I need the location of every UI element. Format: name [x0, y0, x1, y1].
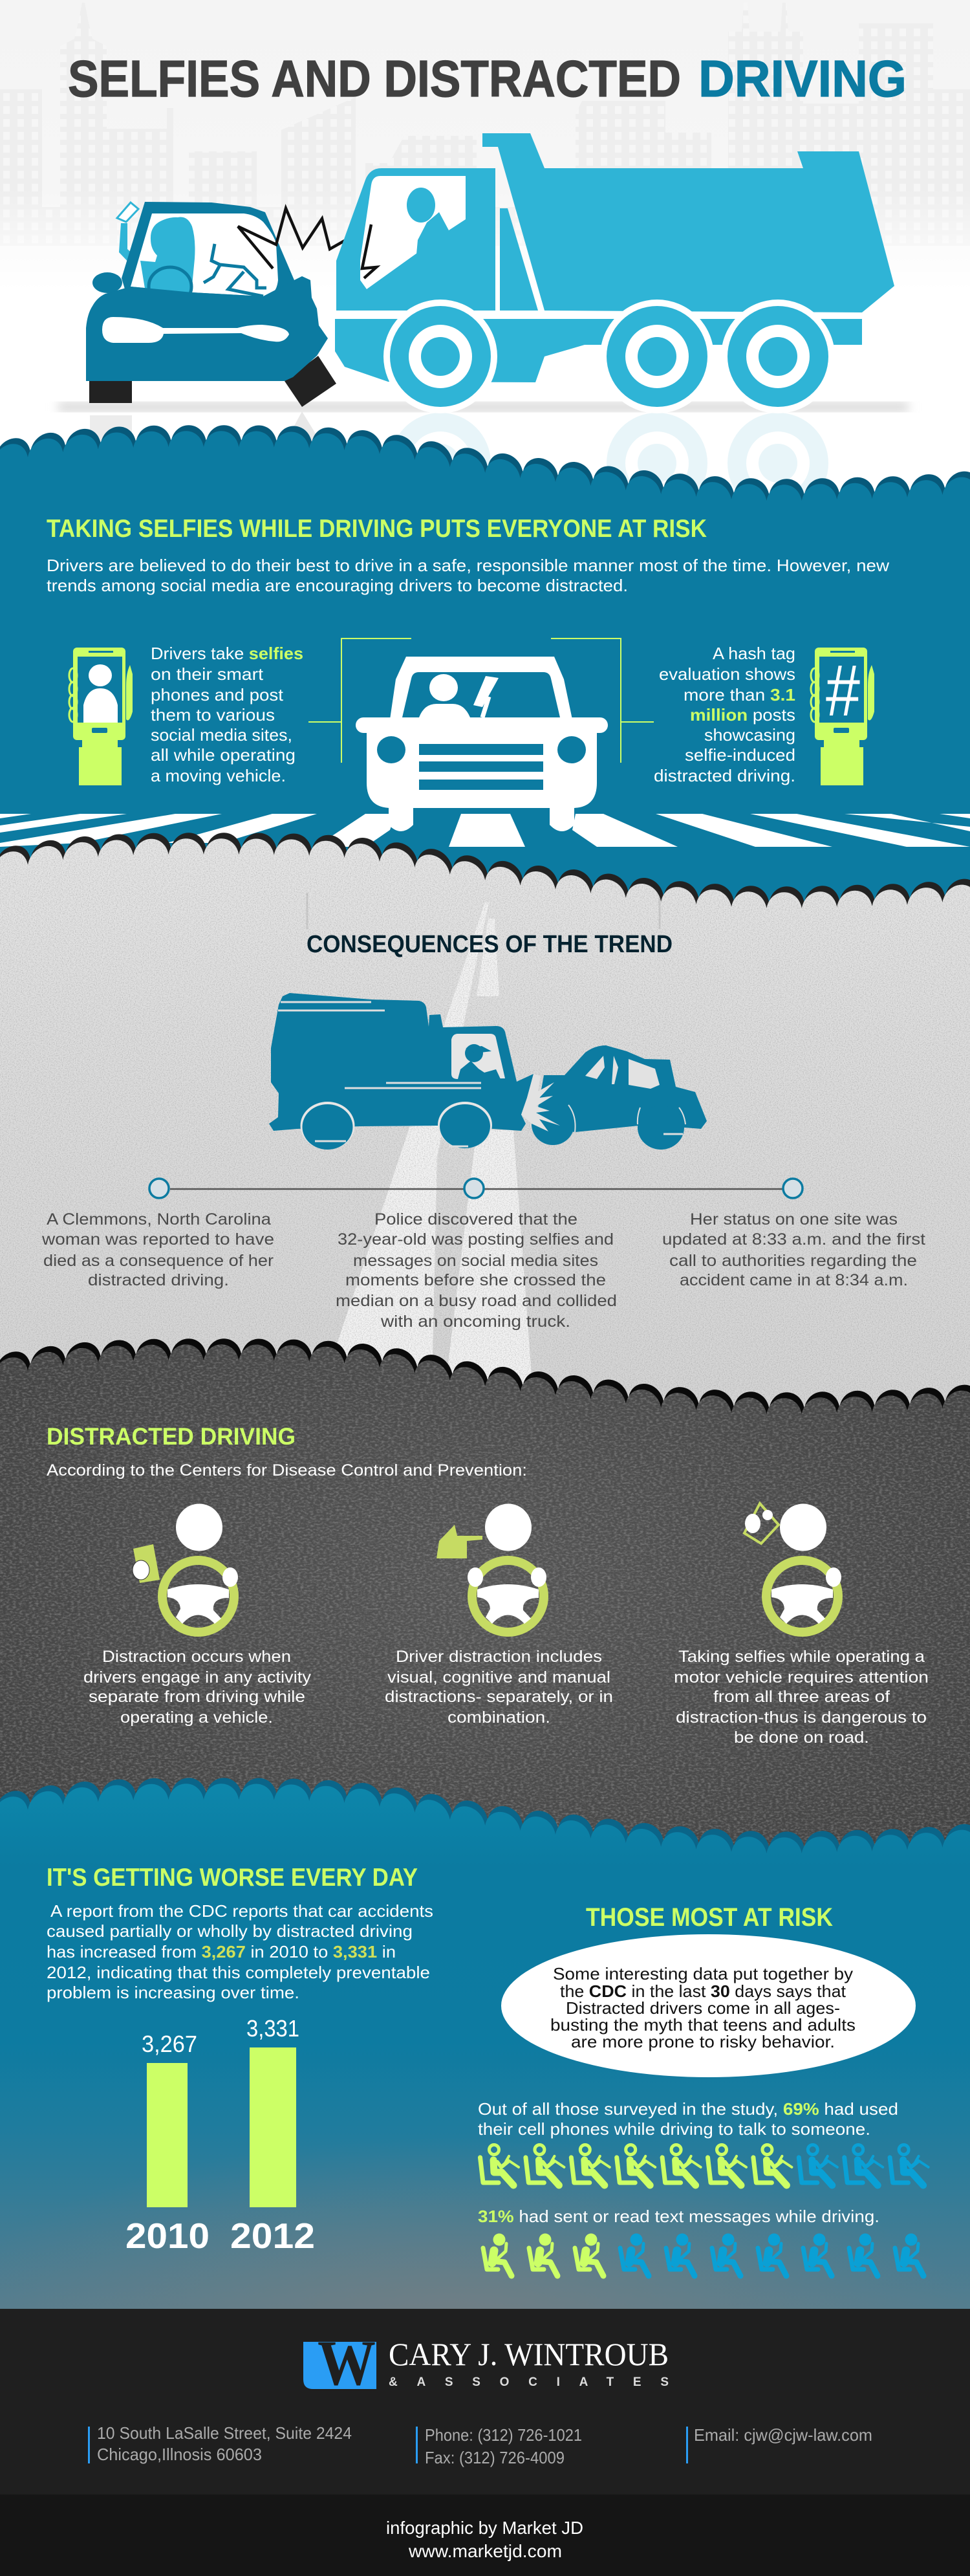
- text: police discovered: 32-year-old was posting selfies and: [338, 1230, 614, 1249]
- heading: getting worse: IT'S GETTING WORSE EVERY DAY: [47, 1864, 418, 1892]
- text: 69 percent: [478, 2099, 898, 2139]
- car wheels: [532, 1104, 685, 1150]
- text: 69 percent: their cell phones while driving to talk to someone.: [478, 2119, 870, 2139]
- van body: [269, 993, 534, 1131]
- panel: footer: [0, 2309, 970, 2494]
- callout: cdc data ellipse: are more prone to risky behavior.: [571, 2032, 835, 2051]
- text: driver distraction: visual, cognitive and manual: [387, 1668, 610, 1686]
- text: driver distraction: Driver distraction includes: [396, 1648, 602, 1666]
- text: hash tag evaluation: showcasing: [704, 725, 795, 745]
- text: police discovered: Police discovered that the: [374, 1210, 577, 1228]
- logo: W: [318, 2327, 376, 2399]
- text: taking selfies danger: from all three areas of: [713, 1688, 890, 1706]
- bar chart: crashes by year: [125, 2015, 315, 2256]
- van wheels: [300, 1102, 492, 1150]
- section shadow: road scallop: [0, 833, 970, 1437]
- car body: [535, 1045, 707, 1132]
- title: SELFIES AND DISTRACTED: [68, 50, 681, 107]
- illustration: van colliding with car: [269, 993, 707, 1150]
- phone and fax: Phone: (312) 726-1021: [425, 2425, 582, 2445]
- text: drivers take selfies: a moving vehicle.: [151, 766, 286, 785]
- text: distraction occurs: drivers engage in any activity: [83, 1668, 312, 1686]
- text: cdc report: [47, 1901, 433, 2002]
- text: 69 percent: Out of all those surveyed in the study, 69% had used: [478, 2099, 898, 2119]
- hero background with city skyline: [0, 0, 970, 485]
- crash spikes: [521, 1074, 560, 1131]
- callout: cdc data ellipse: Distracted drivers come in all ages-: [566, 1998, 840, 2018]
- intro text: trends among social media are encouraging drivers to become distracted.: [47, 576, 628, 595]
- email: Email: cjw@cjw-law.com: [694, 2425, 872, 2445]
- text: cdc report: caused partially or wholly by distracted driving: [47, 1921, 413, 1941]
- text: taking selfies danger: [674, 1648, 929, 1747]
- text: status update: Her status on one site was: [690, 1210, 898, 1228]
- icon: hash tag phone: #: [826, 650, 860, 731]
- callout: cdc data ellipse: the CDC in the last 30 days says that: [560, 1981, 846, 2001]
- text: hash tag evaluation: [654, 644, 795, 785]
- heading: consequences: CONSEQUENCES OF THE TREND: [307, 931, 673, 958]
- text: drivers take selfies: on their smart: [151, 664, 264, 684]
- heading: most at risk: THOSE MOST AT RISK: [586, 1903, 833, 1932]
- phone and fax: Fax: (312) 726-4009: [425, 2448, 565, 2467]
- timeline line: [170, 1188, 782, 1190]
- section shadow: asphalt scallop: [0, 1338, 970, 1943]
- section shadow: lower teal scallop: [0, 1778, 970, 2382]
- text: cdc report: A report from the CDC reports that car accidents: [50, 1901, 433, 1921]
- text: police discovered: moments before she crossed the: [345, 1271, 606, 1289]
- text: distraction occurs: separate from driving while: [89, 1688, 305, 1706]
- pictogram: drivers talking on phones, 7 of 10: [480, 2145, 929, 2185]
- panel: distracted driving: [0, 1344, 970, 1846]
- text: hash tag evaluation: more than 3.1: [684, 685, 795, 704]
- bar chart: crashes by year: 2012: [230, 2216, 315, 2256]
- bracket lines around car: [308, 639, 654, 763]
- text: police discovered: with an oncoming truck.: [380, 1313, 570, 1331]
- text: driver distraction: combination.: [447, 1708, 550, 1727]
- icon: hash tag phone: [811, 648, 874, 785]
- callout: cdc data ellipse: [501, 1934, 916, 2077]
- crosswalk: [0, 814, 970, 847]
- text: distraction occurs: operating a vehicle.: [120, 1708, 273, 1727]
- bar chart: crashes by year: 2010: [125, 2216, 210, 2256]
- icon: driver pointing hand: [436, 1503, 546, 1632]
- panel: credit band: www.marketjd.com: [408, 2541, 562, 2561]
- text: police discovered: [336, 1210, 617, 1331]
- text: drivers take selfies: social media sites,: [151, 725, 292, 745]
- callout: cdc data ellipse: Some interesting data put together by: [553, 1964, 853, 1983]
- intro text: [47, 556, 889, 595]
- van window and driver: [451, 1034, 505, 1079]
- illustration: front view of car with selfie driver: [356, 657, 608, 831]
- text: drivers take selfies: them to various: [151, 705, 275, 725]
- text: status update: call to authorities regarding the: [669, 1252, 917, 1270]
- text: status update: updated at 8:33 a.m. and the first: [662, 1230, 925, 1249]
- text: drivers take selfies: all while operating: [151, 745, 296, 765]
- section shadow: teal scallop: [0, 425, 970, 1029]
- text: cdc report: has increased from 3,267 in 2010 to 3,331 in: [47, 1942, 396, 1961]
- text: drivers take selfies: phones and post: [151, 685, 284, 704]
- icon: driver taking selfie: [744, 1503, 841, 1632]
- text: clemmons: died as a consequence of her: [43, 1252, 274, 1270]
- icon: selfie phone: [69, 648, 133, 785]
- text: clemmons: A Clemmons, North Carolina: [47, 1210, 271, 1228]
- text: drivers take selfies: Drivers take selfies: [151, 644, 303, 663]
- text: police discovered: median on a busy road and collided: [336, 1292, 617, 1310]
- phone and fax: [416, 2425, 582, 2467]
- panel: credit band: infographic by Market JD: [386, 2518, 583, 2538]
- icon: driver holding phone: [133, 1503, 238, 1632]
- title: DRIVING: [698, 50, 907, 107]
- email: [686, 2425, 872, 2463]
- text: driver distraction: [385, 1648, 613, 1727]
- heading: distracted driving: DISTRACTED DRIVING: [47, 1423, 296, 1450]
- panel: credit band: [0, 2494, 970, 2576]
- text: status update: [662, 1210, 925, 1289]
- text: hash tag evaluation: evaluation shows: [659, 664, 795, 684]
- panel: worse every day and most at risk: [0, 1784, 970, 2388]
- subheading: According to the Centers for Disease Control and Prevention:: [47, 1461, 527, 1479]
- address: Chicago,Illnosis 60603: [97, 2445, 262, 2464]
- bar chart: crashes by year: 3,331: [246, 2015, 299, 2042]
- text: taking selfies danger: Taking selfies while operating a: [678, 1648, 925, 1666]
- text: 31 percent: 31% had sent or read text messages while driving.: [478, 2207, 879, 2226]
- text: distraction occurs: [83, 1648, 312, 1727]
- address: [88, 2423, 352, 2464]
- van stripes: [278, 1002, 481, 1146]
- text: driver distraction: distractions- separately, or in: [385, 1688, 613, 1706]
- text: clemmons: woman was reported to have: [41, 1230, 274, 1249]
- text: distraction occurs: Distraction occurs when: [102, 1648, 291, 1666]
- text: hash tag evaluation: distracted driving.: [654, 766, 795, 785]
- timeline nodes: [149, 1179, 803, 1198]
- intro text: Drivers are believed to do their best to drive in a safe, responsible manner most of the time. However, new: [47, 556, 889, 575]
- text: hash tag evaluation: selfie-induced: [685, 745, 795, 765]
- address: 10 South LaSalle Street, Suite 2424: [97, 2423, 352, 2443]
- text: clemmons: [41, 1210, 274, 1289]
- text: taking selfies danger: motor vehicle requires attention: [674, 1668, 929, 1686]
- ground shadow and reflections: [58, 402, 909, 514]
- logo: &ASSOCIATES: [389, 2375, 669, 2389]
- text: taking selfies danger: distraction-thus is dangerous to: [676, 1708, 927, 1727]
- illustration: dump truck: [335, 133, 894, 413]
- text: cdc report: problem is increasing over time.: [47, 1983, 299, 2002]
- text: status update: accident came in at 8:34 a.m.: [680, 1271, 908, 1289]
- logo: CARY J. WINTROUB: [389, 2336, 669, 2372]
- text: hash tag evaluation: A hash tag: [713, 644, 795, 663]
- text: clemmons: distracted driving.: [88, 1271, 229, 1289]
- pictogram: drivers texting, 3 of 10: [483, 2233, 923, 2276]
- logo: [303, 2342, 669, 2389]
- text: hash tag evaluation: million posts: [690, 705, 795, 725]
- text: taking selfies danger: be done on road.: [734, 1729, 869, 1747]
- heading: risk: TAKING SELFIES WHILE DRIVING PUTS EVERYONE AT RISK: [47, 515, 707, 543]
- panel: consequences of the trend: [0, 828, 970, 1443]
- panel: taking selfies: [0, 431, 970, 1035]
- callout: cdc data ellipse: busting the myth that teens and adults: [550, 2015, 856, 2035]
- text: police discovered: messages on social media sites: [353, 1252, 598, 1270]
- illustration: crashed car with selfie driver: [86, 202, 349, 407]
- text: cdc report: 2012, indicating that this completely preventable: [47, 1963, 430, 1982]
- text: drivers take selfies: [151, 644, 303, 785]
- bar chart: crashes by year: 3,267: [142, 2031, 197, 2057]
- car windows: [585, 1056, 660, 1089]
